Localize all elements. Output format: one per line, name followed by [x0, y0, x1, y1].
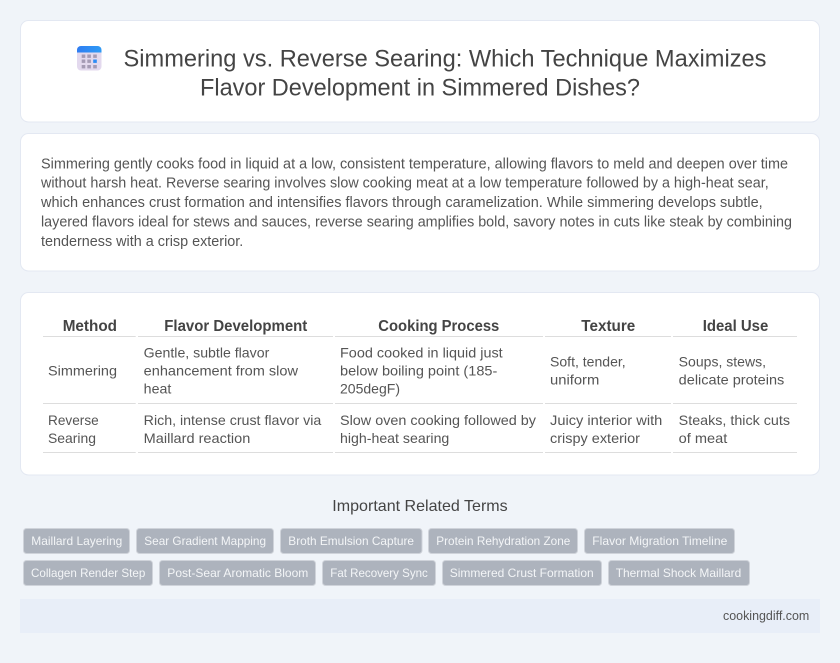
footer [20, 599, 820, 633]
table row: reverse searing: crispy exterior [550, 430, 640, 446]
text block: summary paragraph [40, 156, 792, 250]
table header row: Method [63, 318, 117, 335]
tag: Broth Emulsion Capture [288, 534, 414, 548]
table row: reverse searing: Maillard reaction [144, 430, 250, 446]
table row: reverse searing: Slow oven cooking followed by [340, 412, 536, 428]
tag [24, 560, 152, 586]
tag [442, 560, 602, 586]
table row: simmering: Food cooked in liquid just [340, 345, 503, 361]
table row: reverse searing [48, 412, 790, 446]
table row: reverse searing: of meat [679, 430, 727, 446]
table row: simmering: enhancement from slow [144, 363, 299, 379]
tag: Sear Gradient Mapping [144, 534, 266, 548]
table row: reverse searing: high-heat searing [340, 430, 449, 446]
title: Simmering vs. Reverse Searing: Which Technique Maximizes [124, 46, 766, 73]
text block: summary paragraph: Simmering gently cooks food in liquid at a low, consistent temperature, allowing flavors to meld and deepen over time [41, 156, 788, 172]
tag: Simmered Crust Formation [450, 566, 594, 580]
table row: simmering: Soft, tender, [550, 354, 626, 370]
table row: simmering: Gentle, subtle flavor [144, 345, 270, 361]
text block: summary paragraph: layered flavors ideal for stews and sauces, reverse searing amplifies bold, savory notes in cuts like steak by combining [41, 214, 792, 230]
tag [428, 528, 578, 554]
tag [160, 560, 316, 586]
table row: simmering: 205degF) [340, 381, 400, 397]
icon: calendar [77, 46, 102, 70]
panel: introduction text [20, 134, 820, 271]
tag: Maillard Layering [31, 534, 122, 548]
tag: Protein Rehydration Zone [436, 534, 571, 548]
text block: summary paragraph: without harsh heat. Reverse searing involves slow cooking meat at a low temperature followed by a high-heat sear, [40, 176, 769, 192]
table row: simmering [48, 345, 784, 397]
text block: summary paragraph: which enhances crust formation and intensifies flavors through caramelization. While simmering develops subtle, [40, 195, 763, 211]
tag: Flavor Migration Timeline [592, 534, 728, 548]
table row: simmering: uniform [550, 372, 599, 388]
panel: comparison table [20, 292, 820, 475]
table header row: Ideal Use [703, 318, 769, 335]
tag [584, 528, 734, 554]
table row: reverse searing: Steaks, thick cuts [679, 412, 790, 428]
title: Flavor Development in Simmered Dishes? [200, 75, 640, 102]
tag: Fat Recovery Sync [330, 566, 428, 580]
table row: reverse searing: Juicy interior with [550, 412, 662, 428]
table row: reverse searing: Searing [48, 430, 96, 446]
tag [136, 528, 274, 554]
table row: simmering: heat [144, 381, 171, 397]
table row: reverse searing: Reverse [48, 412, 99, 428]
tag: Thermal Shock Maillard [616, 566, 741, 580]
tag [608, 560, 750, 586]
table row: simmering: below boiling point (185- [340, 363, 498, 379]
tag: Post-Sear Aromatic Bloom [167, 566, 308, 580]
tag [322, 560, 436, 586]
table row: reverse searing: Rich, intense crust flavor via [144, 412, 322, 428]
table row: simmering: delicate proteins [679, 372, 784, 388]
title [124, 46, 766, 102]
panel: header [20, 20, 820, 122]
heading: important related terms: Important Related Terms [332, 498, 508, 515]
table header row: Cooking Process [378, 318, 499, 335]
table row: simmering: Soups, stews, [679, 354, 766, 370]
tag: Collagen Render Step [31, 566, 146, 580]
table row: simmering: Simmering [48, 363, 117, 379]
tag [280, 528, 422, 554]
table header row: Flavor Development [164, 318, 307, 335]
tag [24, 528, 130, 554]
text block: summary paragraph: tenderness with a crisp exterior. [41, 234, 243, 250]
footer: cookingdiff.com [723, 609, 809, 623]
tags: related terms [24, 528, 750, 586]
table header row: Texture [581, 318, 636, 335]
table header row [63, 318, 769, 335]
